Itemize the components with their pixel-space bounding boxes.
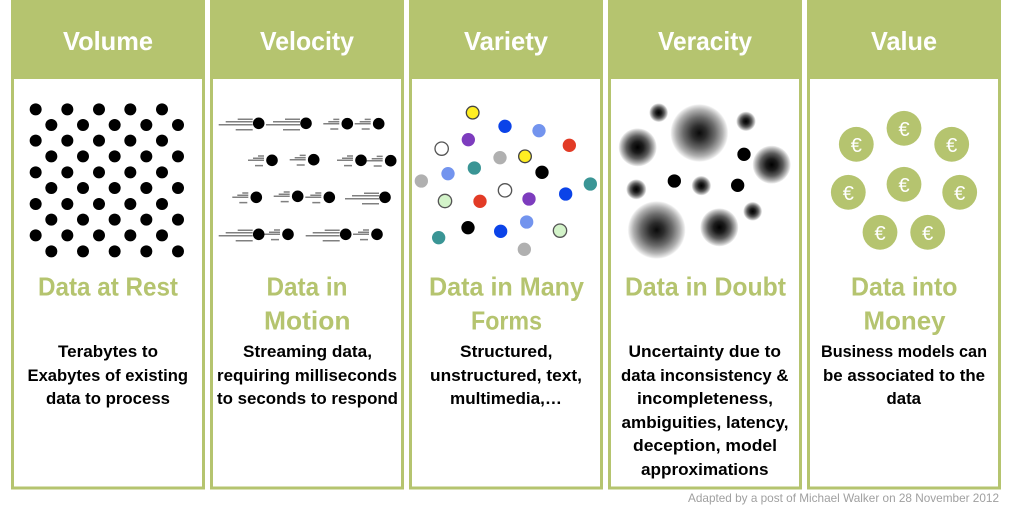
text: Volume description: Exabytes of existing (28, 366, 188, 385)
footer credit: Adapted by a post of Michael Walker on 28 November 2012 (688, 491, 999, 505)
chart: euro coins: € (843, 183, 854, 205)
subtitle: Data in Many Forms: Forms (471, 306, 542, 336)
text: Veracity description: deception, model (633, 436, 777, 455)
subtitle: Data in Motion: Data in (266, 272, 348, 302)
text: Velocity description (217, 342, 398, 408)
panel: Variety (409, 1, 603, 488)
panel: Value (807, 1, 1001, 488)
chart: euro coins: € (922, 223, 933, 245)
text: Value description: Business models can (821, 342, 987, 361)
chart: euro coins: € (851, 135, 862, 157)
text: Volume description (28, 342, 188, 408)
chart: dots at rest (30, 103, 184, 257)
text: Value description (821, 342, 987, 408)
chart: coloured dots (415, 106, 597, 256)
text: Variety description: unstructured, text, (430, 366, 582, 385)
chart: euro coins: € (946, 135, 957, 157)
chart: blurred dots (619, 103, 791, 259)
text: Volume description: Terabytes to (58, 342, 158, 361)
text: Volume description: data to process (46, 389, 170, 408)
text: Variety description: multimedia,… (450, 389, 562, 408)
chart: moving dots (219, 118, 397, 241)
text: Velocity description: requiring milliseconds (217, 366, 397, 385)
subtitle: Data into Money: Data into (851, 272, 958, 302)
text: Velocity description: Streaming data, (243, 342, 372, 361)
heading: Volume: Volume (63, 26, 153, 56)
subtitle: Data in Motion: Motion (264, 306, 350, 336)
text: Value description: be associated to the (823, 366, 985, 385)
subtitle: Data in Many Forms: Data in Many (429, 272, 585, 302)
text: Variety description (430, 342, 582, 408)
heading: Velocity: Velocity (260, 26, 355, 56)
text: Veracity description: incompleteness, (637, 389, 773, 408)
subtitle: Data in Doubt: Data in Doubt (625, 272, 786, 302)
text: Value description: data (886, 389, 922, 408)
text: Veracity description: Uncertainty due to (628, 342, 781, 361)
chart: euro coins (831, 111, 977, 250)
text: Veracity description: data inconsistency & (621, 366, 788, 385)
chart: euro coins: € (898, 119, 910, 141)
subtitle: Data at Rest: Data at Rest (38, 272, 178, 302)
text: Veracity description: approximations (641, 460, 768, 479)
heading: Veracity: Veracity (658, 26, 753, 56)
subtitle: Data into Money (851, 272, 958, 336)
chart: euro coins: € (898, 175, 910, 197)
heading: Value: Value (871, 26, 937, 56)
panel: Velocity (210, 1, 404, 488)
panel: Veracity (608, 1, 802, 488)
text: Velocity description: to seconds to respond (217, 389, 398, 408)
text: Variety description: Structured, (460, 342, 552, 361)
text: Veracity description: ambiguities, latency, (622, 413, 788, 432)
heading: Variety: Variety (464, 26, 549, 56)
chart: euro coins: € (954, 183, 965, 205)
panel: Volume (11, 1, 205, 488)
subtitle: Data into Money: Money (864, 306, 946, 336)
subtitle: Data in Many Forms (429, 272, 585, 336)
chart: euro coins: € (874, 223, 886, 245)
text: Veracity description (621, 342, 788, 479)
subtitle: Data in Motion (264, 272, 350, 336)
